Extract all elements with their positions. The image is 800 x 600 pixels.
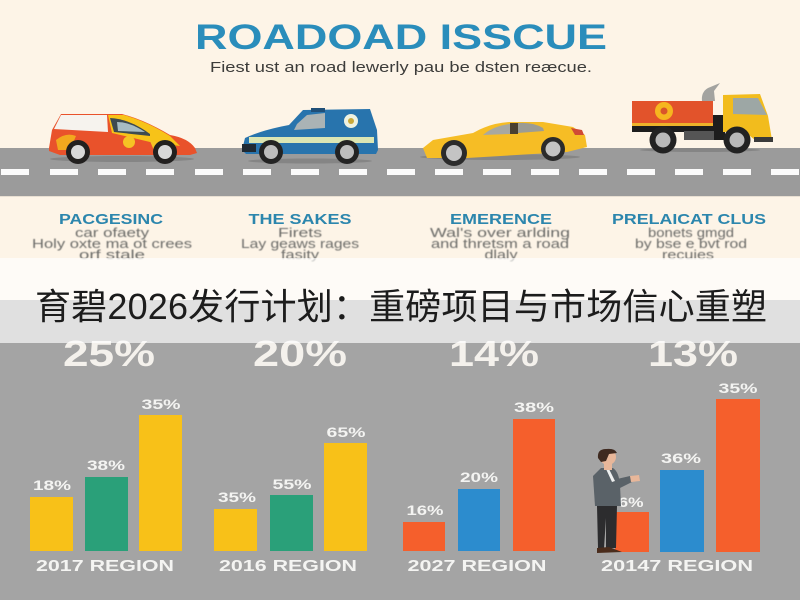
big percent 1: 25% [63,333,155,374]
bar chart 2: 65% [326,425,366,440]
panel: column text 2: fasity [281,247,320,262]
bar chart 1 [30,397,182,575]
subtitle: Fiest ust an road lewerly pau be dsten reæcue. [210,60,592,76]
panel: column text 3: EMERENCE [450,211,552,228]
bar chart 1: 38% [87,458,125,473]
bar chart 4 [601,381,760,575]
bar chart 1: 18% [33,478,71,493]
bar chart 2 [214,425,367,575]
panel: column text 2: Firets [278,225,323,240]
panel: column text 1: PACGESINC [59,211,163,228]
title band: 育碧2026发行计划：重磅项目与市场信心重塑 [35,286,767,327]
panel: column text 4: by bse e bvt rod [635,236,747,251]
title: ROADOAD ISSCUE [195,18,607,57]
bar chart 1: 2017 REGION [36,558,174,575]
bar chart 3: 16% [406,503,444,518]
panel: column text 1: orf stale [79,247,145,262]
panel: column text 2 [241,211,360,262]
panel: column text 4: PRELAICAT CLUS [612,211,766,228]
big percent 2: 20% [253,333,347,374]
panel: column text 3: dlaly [484,247,518,262]
panel: column text 2: Lay geaws rages [241,236,360,251]
panel: column text 4 [612,211,766,262]
bar chart 4: 36% [661,451,701,466]
bar chart 2: 35% [218,490,256,505]
panel: column text 1 [32,211,193,262]
title band [0,258,800,343]
bar chart 3 [403,400,555,575]
icon: yellow sedan [420,122,587,166]
panel: column text 4: recuies [662,247,715,262]
panel: column text 3: and thretsm a road [431,236,569,251]
icon: red and yellow hatchback [49,114,197,164]
big percent 3: 14% [449,333,539,374]
panel: column text 3 [430,211,570,262]
panel: column text 1: Holy oxte ma ot crees [32,236,193,251]
bar chart 4: 6% [618,495,644,510]
icon: dump truck [632,83,773,154]
bar chart 3: 20% [460,470,498,485]
icon: businessman [593,449,640,553]
panel: column text 4: bonets gmgd [648,225,734,240]
panel: column text 3: Wal's over arlding [430,225,570,240]
panel: column text 1: car ofaety [75,225,150,240]
bar chart 3: 2027 REGION [408,558,546,575]
bar chart 2: 2016 REGION [219,558,357,575]
bar chart 1: 35% [142,397,180,412]
panel: column text 2: THE SAKES [248,211,352,228]
bar chart 3: 38% [514,400,554,415]
bar chart 4: 20147 REGION [601,558,753,575]
big percent 4: 13% [648,333,738,374]
icon: blue van [242,108,378,164]
road [0,148,800,197]
bar chart 4: 35% [718,381,758,396]
bar chart 2: 55% [272,477,312,492]
